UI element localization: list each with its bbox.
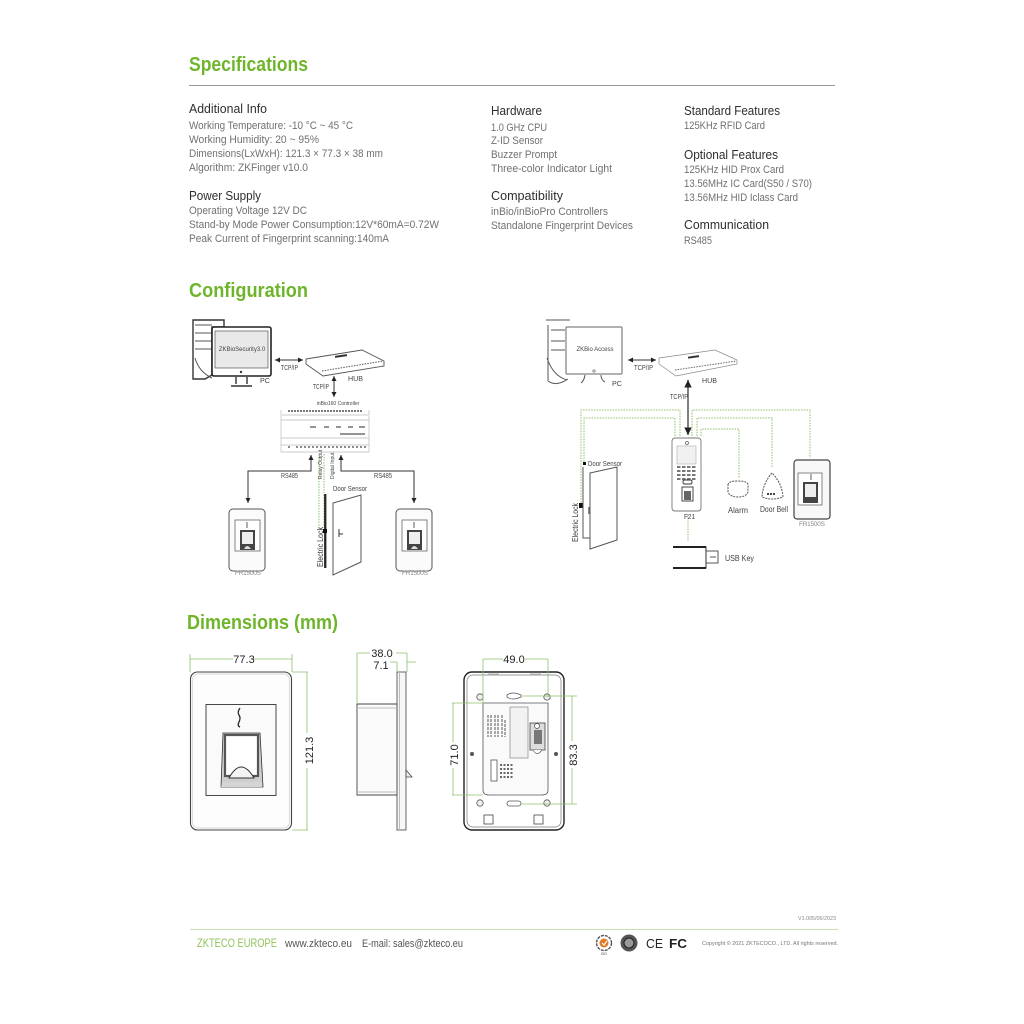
drawing: front view — [190, 654, 316, 830]
footer: contact — [197, 936, 463, 950]
icon: USB key — [673, 547, 755, 568]
icon: seal badge — [620, 934, 638, 952]
text block: compatibility: Compatibility — [491, 189, 564, 203]
text block: compatibility — [491, 189, 633, 232]
text block: compatibility: Standalone Fingerprint Devices — [491, 220, 633, 232]
arrow: RS485 right: RS485 — [374, 473, 392, 480]
text block: optional features: 13.56MHz IC Card(S50 / S70) — [684, 178, 812, 190]
text block: hardware — [491, 104, 612, 175]
drawing: side view — [357, 648, 416, 830]
arrow: PC to hub TCP/IP — [628, 360, 656, 372]
text block: communication — [684, 218, 769, 247]
door and lock wiring: Digital Input — [330, 452, 336, 479]
text block: additional info: Algorithm: ZKFinger v10.0 — [189, 162, 308, 174]
icon: desktop computer: PC — [612, 381, 622, 388]
text block: power supply: Stand-by Mode Power Consumption:12V*60mA=0.72W — [189, 219, 440, 231]
arrow: RS485 left: RS485 — [281, 473, 298, 480]
dimension: 83.3: 83.3 — [568, 744, 580, 766]
text block: standard features: 125KHz RFID Card — [684, 120, 765, 132]
panel: inBio controller: inBio160 Controller — [317, 401, 360, 407]
icon: FR1500S reader: FR1500S — [799, 521, 826, 528]
icon: CE mark: CE — [646, 936, 663, 951]
text block: hardware: Three-color Indicator Light — [491, 163, 612, 175]
icon: FR1500S reader right — [396, 509, 432, 577]
icon: door bell: Door Bell — [760, 505, 788, 514]
icon: desktop computer: ZKBioSecurity3.0 — [219, 347, 266, 353]
dimension: flange 7.1: 7.1 — [373, 660, 389, 672]
text block: power supply: Power Supply — [189, 189, 262, 203]
text block: standard features — [684, 104, 780, 132]
diagram: standalone configuration — [546, 320, 830, 568]
icon: FR1500S reader — [794, 460, 830, 528]
icon: FR1500S reader left: FR1500S — [235, 570, 262, 577]
icon: door and lock: Door Sensor — [588, 461, 623, 468]
text block: power supply: Peak Current of Fingerprint scanning:140mA — [189, 233, 390, 245]
text block: communication: RS485 — [684, 235, 712, 247]
version label: V1.005/06/2023 — [798, 916, 836, 922]
text block: additional info — [189, 102, 383, 174]
dimension: flange 7.1 — [373, 660, 416, 672]
heading: Dimensions: Dimensions (mm) — [187, 612, 338, 634]
icon: FR1500S reader right: FR1500S — [402, 570, 429, 577]
text block: additional info: Dimensions(LxWxH): 121.3 × 77.3 × 38 mm — [189, 148, 383, 160]
icon: desktop computer: ZKBio Access — [576, 347, 614, 353]
dimension: 83.3 — [522, 696, 580, 804]
icon: network hub — [306, 350, 384, 383]
icon: USB key: USB Key — [725, 553, 755, 563]
arrow: RS485 left — [248, 455, 311, 503]
dimension: width 77.3: 77.3 — [233, 654, 255, 666]
diagram: inBio controller configuration — [193, 320, 432, 577]
text block: optional features: 125KHz HID Prox Card — [684, 164, 784, 176]
text block: communication: Communication — [684, 218, 769, 232]
text block: optional features: 13.56MHz HID Iclass Card — [684, 192, 798, 204]
icon: desktop computer: PC — [260, 378, 270, 385]
text block: optional features: Optional Features — [684, 148, 778, 162]
dimension: width 77.3 — [190, 654, 292, 672]
heading: Configuration: Configuration — [189, 280, 308, 302]
text block: additional info: Additional Info — [189, 102, 267, 116]
arrow: hub to F21 TCP/IP — [670, 380, 688, 435]
dimension: depth 38.0: 38.0 — [371, 648, 393, 660]
icon: door and lock: Electric Lock — [571, 502, 580, 542]
icon: FC mark: FC — [669, 936, 688, 951]
drawing: back view — [449, 654, 580, 830]
dimension: 49.0 — [483, 654, 548, 704]
text block: optional features — [684, 148, 812, 204]
dimension: 71.0 — [449, 703, 483, 795]
icon: FR1500S reader left — [229, 509, 265, 577]
icon: F21 terminal: F21 — [684, 514, 695, 521]
arrow: RS485 right — [341, 455, 414, 503]
icon: certification badge: ISO — [601, 952, 607, 956]
text block: hardware: Hardware — [491, 104, 542, 118]
icon: network hub: HUB — [348, 376, 363, 383]
text block: compatibility: inBio/inBioPro Controllers — [491, 206, 608, 218]
icon: door bell — [760, 473, 788, 514]
copyright: Copyright © 2021 ZKTECOCO., LTD. All rights reserved. — [702, 940, 838, 947]
arrow: PC to hub TCP/IP — [275, 360, 303, 372]
panel: inBio controller — [281, 401, 369, 452]
icon: alarm — [728, 481, 748, 515]
arrow: PC to hub TCP/IP: TCP/IP — [634, 365, 653, 372]
icon: F21 terminal — [672, 438, 701, 521]
arrow: hub to controller TCP/IP: TCP/IP — [313, 384, 329, 391]
dimension: depth 38.0 — [357, 648, 407, 704]
door and lock wiring: Door Sensor — [333, 486, 368, 493]
text block: hardware: Buzzer Prompt — [491, 149, 557, 161]
icon: alarm: Alarm — [728, 506, 748, 515]
text block: additional info: Working Humidity: 20 ~ 95% — [189, 134, 319, 146]
text block: hardware: Z-ID Sensor — [491, 135, 543, 147]
text block: hardware: 1.0 GHz CPU — [491, 122, 547, 134]
door and lock wiring: Relay Output — [318, 449, 324, 479]
door and lock wiring: Electric Lock — [316, 526, 325, 567]
arrow: hub to F21 TCP/IP: TCP/IP — [670, 394, 688, 401]
text block: power supply — [189, 189, 440, 245]
footer: contact: E-mail: sales@zkteco.eu — [362, 938, 463, 950]
icon: network hub: HUB — [702, 378, 717, 385]
dimension: height 121.3 — [292, 672, 316, 830]
text block: standard features: Standard Features — [684, 104, 780, 118]
arrow: hub to controller TCP/IP — [313, 376, 334, 397]
text block: additional info: Working Temperature: -10 °C ~ 45 °C — [189, 120, 353, 132]
dimension: 71.0: 71.0 — [449, 744, 461, 766]
footer: contact: ZKTECO EUROPE — [197, 936, 277, 950]
icon: desktop computer — [193, 320, 271, 386]
dimension: 49.0: 49.0 — [503, 654, 525, 666]
door and lock wiring — [316, 449, 368, 575]
footer: contact: www.zkteco.eu — [284, 938, 352, 950]
icon: door and lock — [571, 461, 623, 549]
icon: desktop computer — [546, 320, 622, 388]
arrow: PC to hub TCP/IP: TCP/IP — [281, 365, 298, 372]
dimension: height 121.3: 121.3 — [304, 737, 316, 764]
heading: Specifications: Specifications — [189, 54, 308, 76]
text block: power supply: Operating Voltage 12V DC — [189, 205, 307, 217]
wiring: green dotted connections — [581, 410, 810, 542]
icon: network hub — [659, 350, 737, 385]
icon: certification badge — [596, 936, 612, 956]
